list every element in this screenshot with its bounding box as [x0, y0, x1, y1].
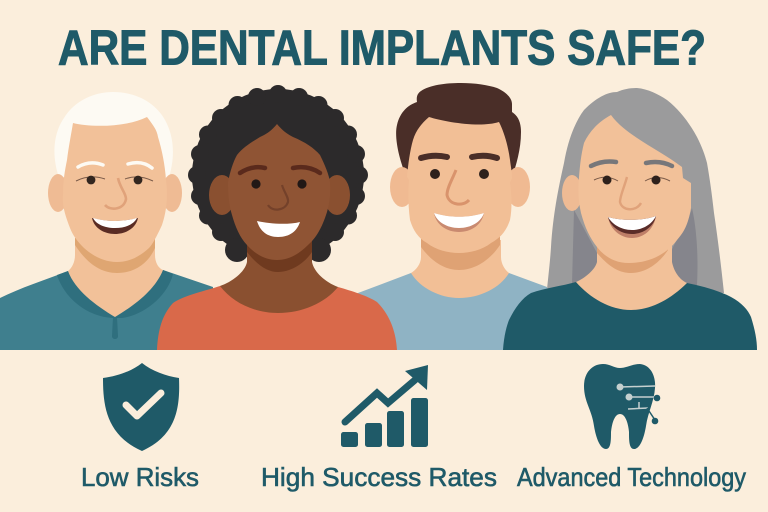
icon: rising bar chart with arrow [341, 365, 428, 447]
person: man with dark hair [340, 83, 547, 350]
person: woman with curly hair [157, 85, 397, 350]
icon: tooth with circuit lines [584, 364, 660, 449]
person: woman with long grey hair [503, 88, 757, 350]
label: advanced technology: Advanced Technology [517, 462, 746, 492]
person: older man with white hair [0, 92, 213, 350]
label: low risks: Low Risks [81, 462, 199, 492]
label: high success rates: High Success Rates [261, 462, 497, 492]
icon: shield with check [103, 363, 179, 451]
